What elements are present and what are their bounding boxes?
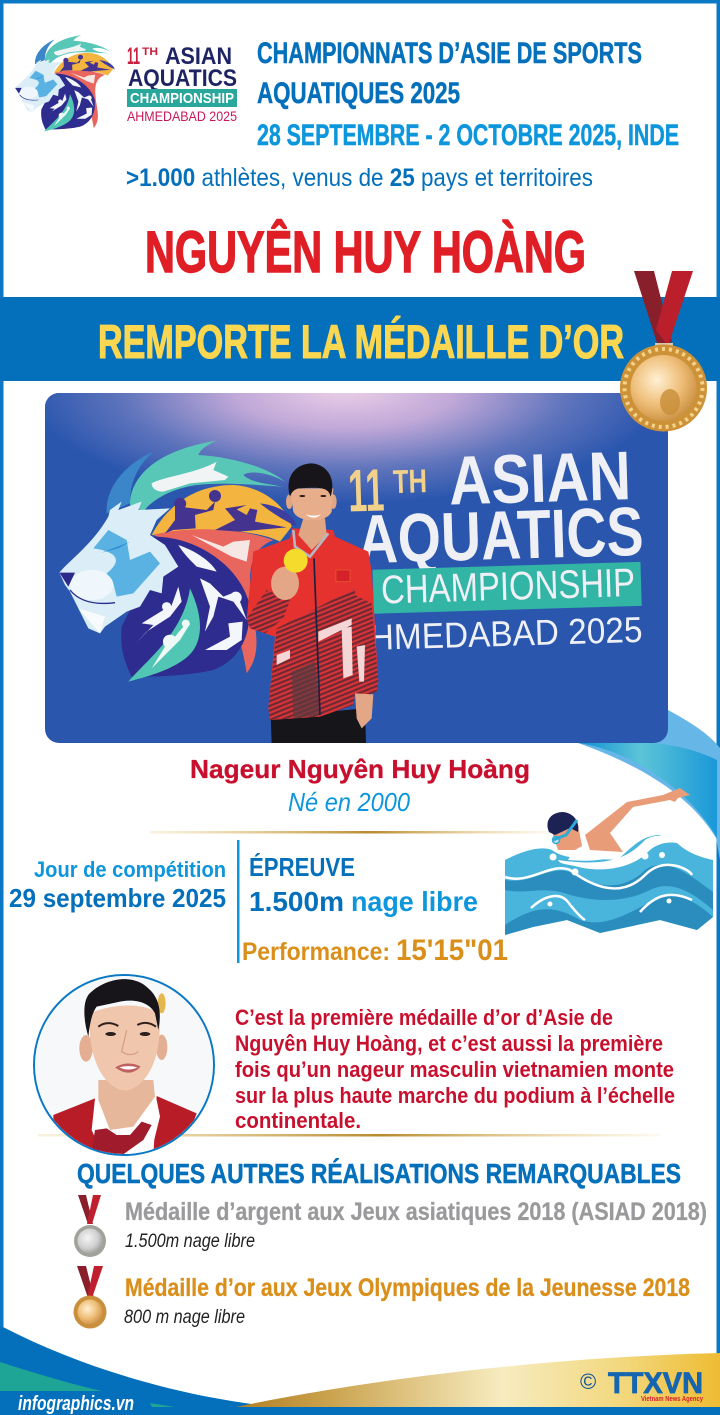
photo: athlete in front of championship backdrop xyxy=(45,393,668,743)
icon: silver medal xyxy=(74,1195,106,1257)
logo wordmark: TH xyxy=(142,46,158,58)
logo wordmark: CHAMPIONSHIP xyxy=(130,90,234,107)
logo wordmark: AHMEDABAD 2025 xyxy=(127,108,237,124)
logo wordmark: ASIAN xyxy=(165,43,232,70)
backdrop lettering: TH xyxy=(392,462,427,500)
achievement: silver medal: 1.500m nage libre xyxy=(125,1231,255,1252)
backdrop lettering: ASIAN xyxy=(448,437,632,519)
key message paragraph: sur la plus haute marche du podium à l’échelle xyxy=(235,1083,675,1108)
copyright and agency logo: © xyxy=(580,1369,596,1394)
logo lion emblem xyxy=(15,35,115,131)
achievement: silver medal xyxy=(74,1195,707,1257)
portrait of athlete xyxy=(34,975,214,1157)
competition date xyxy=(9,857,226,913)
achievement: youth olympics gold: 800 m nage libre xyxy=(124,1307,245,1328)
logo wordmark xyxy=(127,43,237,124)
icon: swimmer in waves xyxy=(505,788,713,935)
event info xyxy=(242,852,508,967)
decorative frame top xyxy=(0,0,720,4)
vertical divider xyxy=(237,840,240,963)
waves xyxy=(505,835,713,935)
caption: birth year: Né en 2000 xyxy=(288,787,410,817)
achievement: youth olympics gold xyxy=(74,1266,690,1328)
backdrop lettering: 11 xyxy=(347,456,385,524)
event info: 1.500m xyxy=(249,886,344,917)
caption: athlete name: Nageur Nguyên Huy Hoàng xyxy=(190,754,530,784)
logo wordmark: AQUATICS xyxy=(128,65,237,92)
backdrop lion emblem xyxy=(59,441,297,682)
athlete xyxy=(247,463,378,743)
copyright and agency logo: TTXVN xyxy=(608,1367,703,1400)
key message paragraph: continentale. xyxy=(235,1108,361,1133)
copyright and agency logo: Vietnam News Agency xyxy=(641,1396,703,1403)
event info: ÉPREUVE xyxy=(249,852,355,882)
title band xyxy=(0,297,720,381)
event info: Performance: xyxy=(242,938,390,966)
decorative frame right xyxy=(716,0,720,1415)
event logo xyxy=(15,35,237,131)
backdrop lettering xyxy=(350,452,642,650)
event info: 15'15"01 xyxy=(396,934,508,967)
top right swoosh xyxy=(578,710,720,860)
icon: gold medal xyxy=(620,271,707,432)
event info: nage libre xyxy=(351,886,478,917)
logo wordmark: 11 xyxy=(127,43,140,70)
competition date: Jour de compétition xyxy=(34,857,226,882)
footer site name: infographics.vn xyxy=(18,1393,134,1415)
key message paragraph: C’est la première médaille d’or d’Asie de xyxy=(235,1005,613,1030)
footer xyxy=(0,1327,720,1415)
event figures: >1.000 athlètes, venus de 25 pays et territoires xyxy=(126,164,593,192)
copyright and agency logo xyxy=(580,1367,703,1403)
swimmer xyxy=(547,788,690,852)
key message paragraph: fois qu’un nageur masculin vietnamien monte xyxy=(235,1057,674,1082)
gold divider bottom xyxy=(38,1134,660,1136)
footer blue wedge xyxy=(0,1327,720,1415)
key message paragraph xyxy=(235,1005,675,1133)
decorative frame left xyxy=(0,0,4,1415)
gold divider top xyxy=(150,831,550,834)
backdrop lettering: CHAMPIONSHIP xyxy=(380,561,636,613)
backdrop lettering: AQUATICS xyxy=(356,493,645,578)
header: event name and dates: AQUATIQUES 2025 xyxy=(257,77,460,110)
header: event name and dates xyxy=(257,37,679,152)
backdrop lettering: AHMEDABAD 2025 xyxy=(347,609,643,659)
footer teal accent xyxy=(0,1362,175,1407)
competition date: 29 septembre 2025 xyxy=(9,883,226,913)
icon: gold medal small xyxy=(74,1266,106,1328)
key message paragraph: Nguyên Huy Hoàng, et c’est aussi la première xyxy=(235,1031,663,1056)
footer gold swoosh xyxy=(236,1353,720,1407)
